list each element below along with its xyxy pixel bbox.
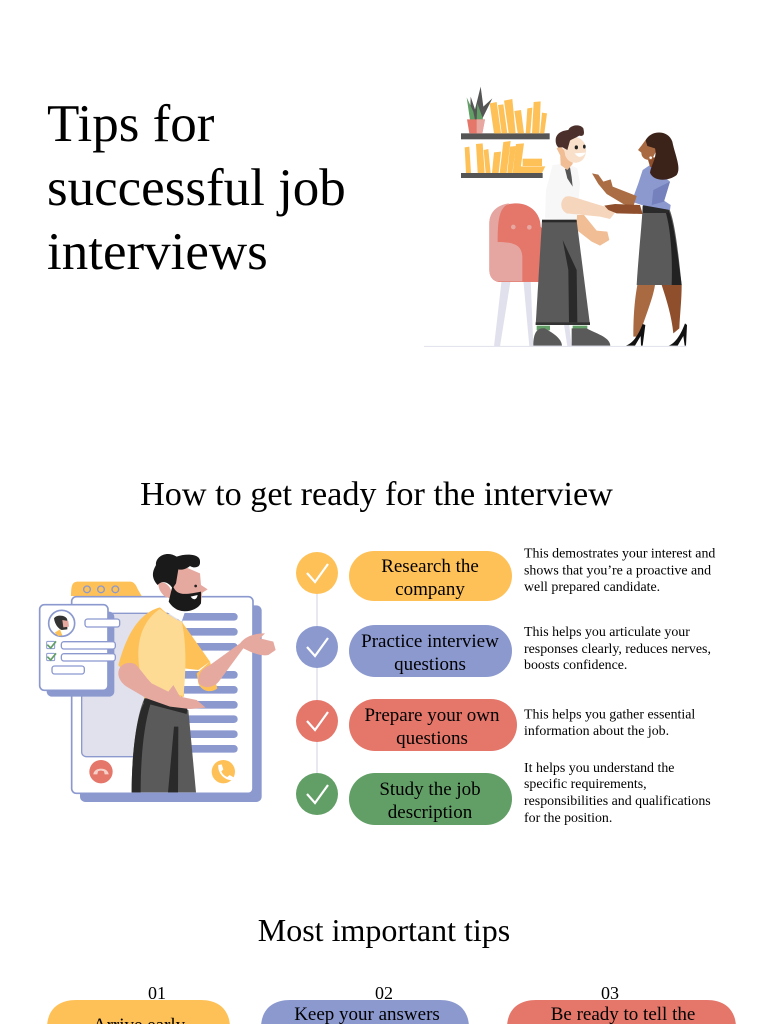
pill 1: company [395,579,465,600]
description 3: information about the job. [524,724,669,739]
tip 02: 02 [375,983,393,1003]
step 1: research the company [296,546,715,601]
icon: call [212,760,235,783]
pill 2: questions [394,654,466,675]
tip 03: 03 [601,983,619,1003]
tip 01: 01 [148,983,166,1003]
title [47,95,346,281]
description 4: responsibilities and qualifications [524,794,711,809]
description 2: responses clearly, reduces nerves, [524,642,711,657]
description 3 [524,708,695,739]
tip 03 [507,983,736,1024]
description 1 [524,546,715,595]
pill 4: Study the job [379,779,481,800]
description 2 [524,625,711,673]
man with beard [118,554,276,792]
heading: how to get ready: How to get ready for the interview [140,476,613,513]
pill 4 [349,773,512,825]
profile card [40,605,120,697]
description 2: boosts confidence. [524,658,627,673]
video window [71,582,262,802]
description 4: for the position. [524,811,612,826]
pill 2: Practice interview [361,631,499,652]
step 3: prepare your own questions [296,699,695,751]
pill 3: questions [396,728,468,749]
books [465,99,547,173]
plant [467,87,492,133]
title: successful job [47,159,346,217]
description 2: This helps you articulate your [524,625,690,640]
tip 01 [47,983,230,1024]
pill 1 [349,551,512,601]
description 1: This demostrates your interest and [524,546,715,562]
timeline connector [316,590,318,780]
title: interviews [47,223,268,281]
illustration: handshake in office [424,87,687,346]
icon: hang up [89,760,113,783]
check badge 3 [296,700,338,742]
pill 4: description [388,802,473,823]
pill 1: Research the [381,556,479,577]
check badge 1 [296,552,338,594]
check badge 2 [296,626,338,668]
woman [592,133,687,346]
tip 02 [261,983,469,1024]
check badge 4 [296,773,338,815]
description 1: well prepared candidate. [524,580,660,595]
description 4: specific requirements, [524,777,647,792]
man [533,125,615,346]
title: Tips for [47,95,215,153]
chair [489,203,572,346]
description 4: It helps you understand the [524,761,674,776]
step 2: practice interview questions [296,625,711,677]
pill 3: Prepare your own [364,705,500,726]
step 4: study the job description [296,761,711,826]
description 1: shows that you’re a proactive and [524,564,711,578]
description 3: This helps you gather essential [524,708,695,722]
heading: most important tips: Most important tips [258,912,510,948]
pill 2 [349,625,512,677]
shelves [461,133,550,178]
pill 3 [349,699,517,751]
illustration: video call man [40,554,276,802]
description 4 [524,761,711,826]
